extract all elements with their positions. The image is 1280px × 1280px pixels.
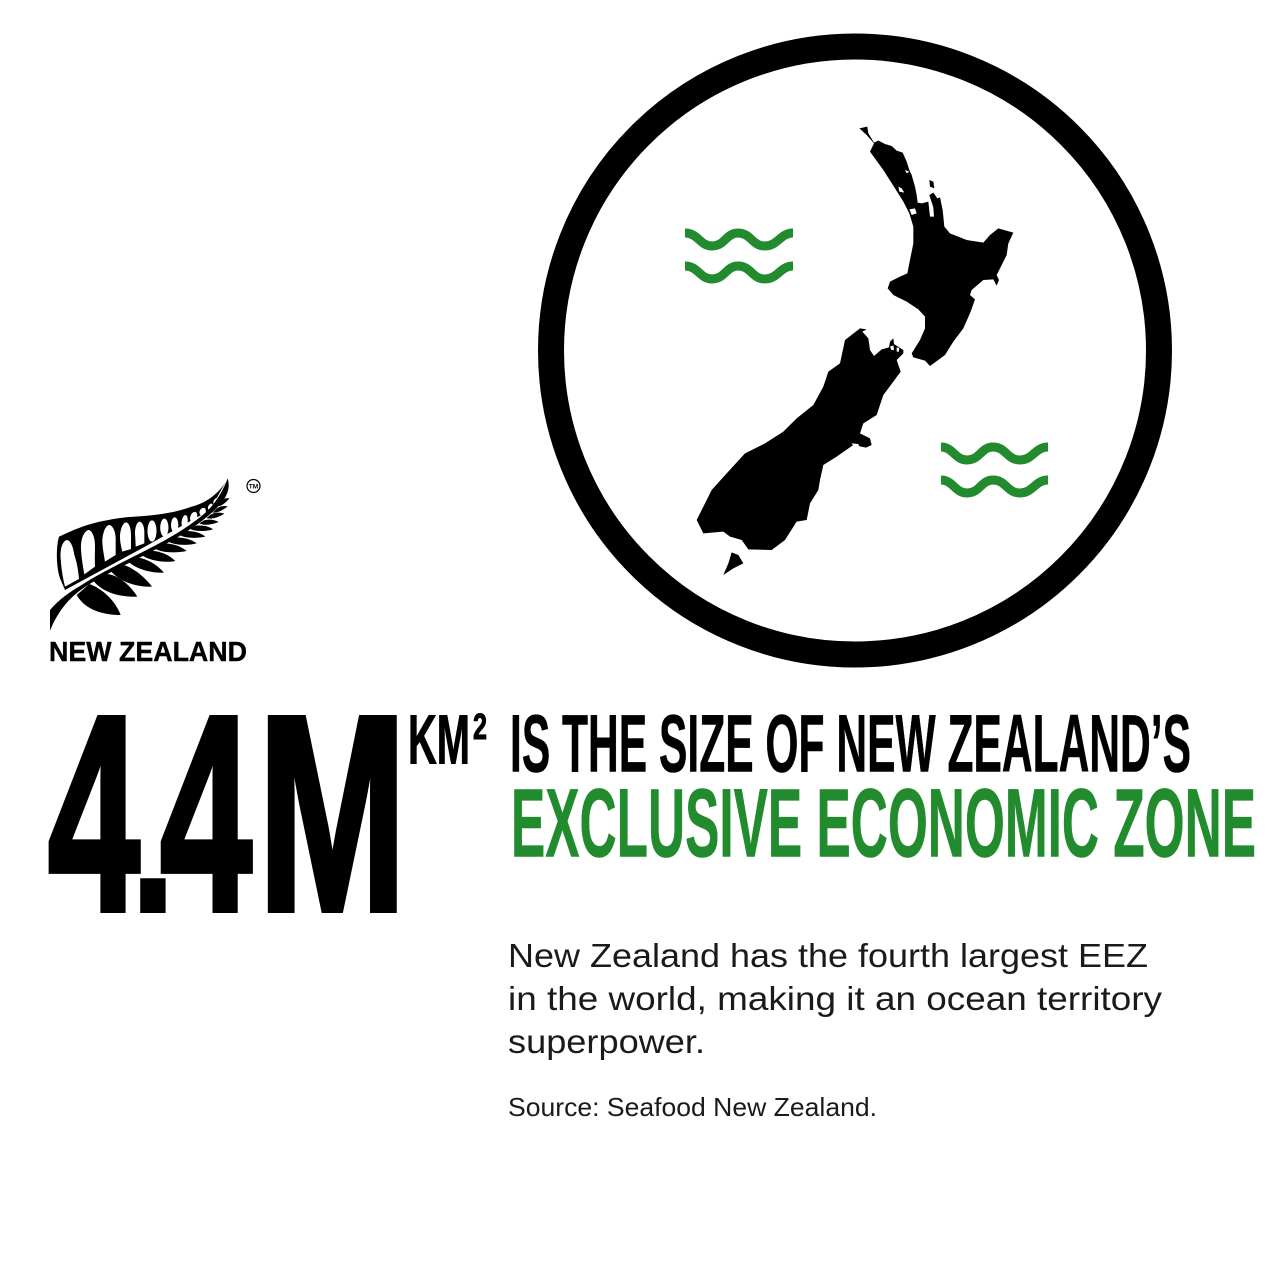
- circle outline: [551, 46, 1159, 654]
- logo: New Zealand fern: [49, 478, 260, 667]
- body text: in the world, making it an ocean territory: [508, 980, 1163, 1017]
- unit: km squared: KM: [408, 700, 470, 778]
- logo wordmark: NEW ZEALAND: [49, 636, 247, 667]
- body text: [508, 937, 1163, 1060]
- map: North Island: [859, 127, 1013, 366]
- source note: Source: Seafood New Zealand.: [508, 1092, 877, 1122]
- panel: map in circle: [551, 46, 1159, 654]
- trademark symbol: [247, 480, 260, 492]
- big number: M: [258, 658, 407, 970]
- big number: 4: [48, 658, 141, 970]
- body text: New Zealand has the fourth largest EEZ: [508, 937, 1148, 974]
- big number: .: [128, 703, 178, 963]
- icon: silver fern: [50, 478, 229, 631]
- big number: 4: [160, 658, 253, 970]
- big number: [48, 658, 407, 970]
- map: South Island: [697, 328, 903, 575]
- map: Stewart Island: [723, 552, 743, 575]
- unit: km squared: 2: [473, 706, 487, 747]
- icon: waves lower right: [941, 447, 1048, 493]
- icon: waves upper left: [685, 233, 793, 279]
- body text: superpower.: [508, 1023, 705, 1060]
- trademark symbol: TM: [249, 484, 258, 490]
